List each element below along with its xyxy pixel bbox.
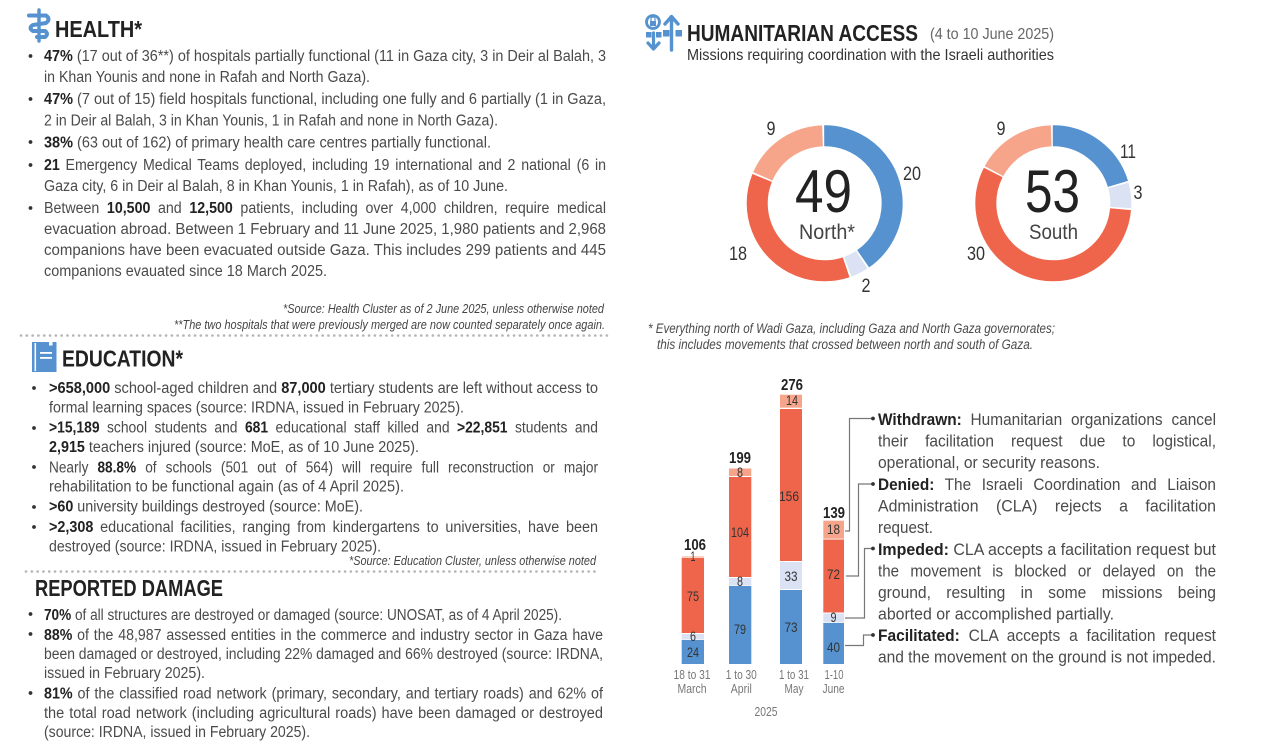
text block: education bullets: rehabilitation to be functional again (as of 4 April 2025). bbox=[49, 478, 404, 496]
bar: April: 104 bbox=[731, 524, 749, 540]
text block: health bullets bbox=[29, 48, 606, 280]
text block: reported damage bullets: been damaged or destroyed, including 22% damaged and 66% destroyed (source: IRDNA, bbox=[44, 646, 603, 663]
source note: health: **The two hospitals that were previously merged are now counted separately once again. bbox=[174, 317, 605, 332]
text block: health bullets: 2 in Deir al Balah, 3 in Khan Younis, 1 in Rafah and none in North Gaza). bbox=[44, 112, 498, 130]
source note: health: *Source: Health Cluster as of 2 June 2025, unless otherwise noted bbox=[283, 301, 605, 316]
legend text: denied: Administration (CLA) rejects a facilitation bbox=[878, 496, 1216, 516]
donut chart: north: North* bbox=[799, 221, 855, 244]
axis labels: June bbox=[822, 682, 845, 696]
donut chart: south bbox=[967, 119, 1142, 271]
bar: May: 14 bbox=[786, 392, 798, 408]
legend text: impeded: aborted or accomplished partially. bbox=[878, 604, 1114, 624]
bar: April: 199 bbox=[729, 450, 751, 467]
bar: March: 106 bbox=[684, 537, 706, 554]
footnote: north definition: this includes movements that crossed between north and south of Gaza. bbox=[657, 337, 1033, 352]
legend text: withdrawn bbox=[878, 410, 1216, 472]
text block: reported damage bullets: the total road network (including agricultural roads) have been damaged or destroyed bbox=[44, 705, 603, 722]
bar: March: 24 bbox=[687, 644, 699, 660]
axis labels: 2025 bbox=[754, 705, 778, 719]
donut chart: south: South bbox=[1029, 221, 1078, 244]
text block: reported damage bullets: issued in February 2025). bbox=[44, 665, 205, 682]
axis labels: May bbox=[784, 682, 804, 696]
bar: May bbox=[779, 377, 803, 664]
text block: education bullets: 2,915 teachers injured (source: MoE, as of 10 June 2025). bbox=[49, 439, 419, 456]
axis labels: March bbox=[678, 682, 707, 696]
axis labels bbox=[674, 668, 845, 719]
donut chart: north: 49 bbox=[795, 158, 852, 225]
legend text: denied bbox=[878, 475, 1216, 537]
legend text: impeded: Impeded: CLA accepts a facilitation request but bbox=[878, 540, 1216, 559]
bar: April: 79 bbox=[734, 621, 746, 637]
icon: health staff with snake bbox=[29, 10, 48, 41]
legend text: denied: Denied: The Israeli Coordination and Liaison bbox=[878, 475, 1216, 494]
donut chart: north: 18 bbox=[729, 244, 747, 265]
legend text: facilitated: and the movement on the ground is not impeded. bbox=[878, 648, 1216, 666]
bar: March: 1 bbox=[690, 548, 696, 564]
legend text: withdrawn: their facilitation request due to logistical, bbox=[878, 432, 1216, 450]
text block: education bullets: destroyed (source: IRDNA, issued in February 2025). bbox=[49, 538, 381, 556]
text block: education bullets bbox=[32, 380, 598, 556]
text block: health bullets: 21 Emergency Medical Teams deployed, including 19 international and 2 national (6 in bbox=[44, 157, 606, 174]
legend text: denied: request. bbox=[878, 518, 933, 537]
icon: education book bbox=[32, 342, 56, 372]
footnote: north definition bbox=[648, 321, 1055, 352]
donut chart: north: 20 bbox=[903, 164, 921, 185]
bar: May: 33 bbox=[784, 568, 798, 584]
text block: reported damage bullets: 70% of all structures are destroyed or damaged (source: UNOSAT, as of 4 April 2025). bbox=[44, 607, 562, 624]
text block: health bullets: Between 10,500 and 12,500 patients, including over 4,000 children, require medical bbox=[44, 200, 606, 217]
text block: health bullets: companions evauated since 18 March 2025. bbox=[44, 263, 327, 280]
axis labels: 1-10 bbox=[824, 668, 844, 682]
bar: June: 40 bbox=[827, 639, 840, 655]
donut chart: north: 2 bbox=[862, 276, 870, 297]
source note: education: *Source: Education Cluster, unless otherwise noted bbox=[349, 553, 597, 568]
text block: education bullets: >60 university buildings destroyed (source: MoE). bbox=[49, 498, 363, 516]
text block: education bullets: >15,189 school students and 681 educational staff killed and >22,851 students and bbox=[49, 420, 598, 436]
bar: May: 156 bbox=[779, 488, 799, 504]
legend text: withdrawn: operational, or security reasons. bbox=[878, 453, 1100, 472]
donut chart: north: 9 bbox=[766, 119, 776, 140]
legend text: facilitated: Facilitated: CLA accepts a facilitation request bbox=[878, 626, 1216, 645]
subtitle: Missions requiring coordination with the Israeli authorities bbox=[687, 47, 1054, 64]
bar: June bbox=[823, 505, 845, 664]
text block: health bullets: in Khan Younis and none in Rafah and North Gaza). bbox=[44, 69, 370, 86]
axis labels: April bbox=[731, 682, 752, 696]
bar: March: 6 bbox=[690, 628, 696, 644]
bar: May: 276 bbox=[781, 377, 803, 394]
donut chart: north bbox=[729, 119, 921, 297]
axis labels: 18 to 31 bbox=[674, 668, 711, 682]
text block: reported damage bullets: 81% of the classified road network (primary, secondary, and tertiary roads) and 62% of bbox=[44, 686, 604, 702]
text block: education bullets: >658,000 school-aged children and 87,000 tertiary students are left without access to bbox=[49, 380, 598, 397]
axis labels: 1 to 30 bbox=[726, 668, 757, 682]
text block: education bullets: >2,308 educational facilities, ranging from kindergartens to universities, have been bbox=[49, 519, 598, 536]
axis labels: 1 to 31 bbox=[779, 668, 809, 682]
text block: reported damage bullets bbox=[29, 607, 604, 741]
bar: June: 139 bbox=[823, 505, 845, 522]
bar: June: 72 bbox=[827, 566, 840, 582]
legend text: impeded bbox=[878, 540, 1216, 624]
text block: education bullets: formal learning spaces (source: IRDNA, issued in February 2025). bbox=[49, 400, 464, 416]
legend text: impeded: ground, resulting in some missions being bbox=[878, 583, 1216, 602]
donut chart: south: 3 bbox=[1134, 183, 1142, 204]
text block: health bullets: 38% (63 out of 162) of primary health care centres partially functional. bbox=[44, 134, 491, 152]
heading: education: EDUCATION* bbox=[62, 346, 183, 372]
source note: health bbox=[174, 301, 605, 332]
legend text: impeded: the movement is blocked or delayed on the bbox=[878, 562, 1216, 580]
bar: March: 75 bbox=[687, 588, 699, 604]
connector lines from bars to legend bbox=[845, 417, 875, 646]
text block: health bullets: 47% (7 out of 15) field hospitals functional, including one fully and 6 partially (1 in Gaza, bbox=[44, 91, 606, 108]
text block: health bullets: 47% (17 out of 36**) of hospitals partially functional (11 in Gaza city, 3 in Deir al Balah, 3 bbox=[44, 48, 606, 65]
heading: health: HEALTH* bbox=[55, 16, 142, 42]
heading: reported damage: REPORTED DAMAGE bbox=[35, 575, 223, 601]
footnote: north definition: * Everything north of Wadi Gaza, including Gaza and North Gaza governorates; bbox=[648, 321, 1055, 336]
donut chart: south: 53 bbox=[1025, 158, 1080, 225]
bar: April bbox=[729, 450, 751, 664]
text block: health bullets: companions have been evacuated outside Gaza. This includes 299 patients and 445 bbox=[44, 242, 606, 259]
bar: April: 8 bbox=[737, 573, 743, 589]
legend text: withdrawn: Withdrawn: Humanitarian organizations cancel bbox=[878, 410, 1216, 429]
donut chart: south: 9 bbox=[996, 119, 1006, 140]
bar: March bbox=[682, 537, 706, 664]
bar: May: 73 bbox=[784, 619, 798, 635]
bar: June: 9 bbox=[830, 609, 837, 625]
stacked bar chart: monthly missions bbox=[674, 377, 845, 719]
bar: June: 18 bbox=[827, 521, 840, 537]
text block: health bullets: evacuation abroad. Between 1 February and 11 June 2025, 1,980 patients and 2,968 bbox=[44, 221, 606, 238]
icon: humanitarian access arrows and lock bbox=[646, 16, 682, 50]
donut chart: south: 30 bbox=[967, 244, 985, 265]
text block: education bullets: Nearly 88.8% of schools (501 out of 564) will require full reconstruction or major bbox=[49, 460, 598, 476]
legend text: facilitated bbox=[878, 626, 1216, 666]
heading: humanitarian access: HUMANITARIAN ACCESS bbox=[687, 20, 918, 46]
bar: April: 8 bbox=[737, 464, 743, 480]
text block: reported damage bullets: (source: IRDNA, issued in February 2025). bbox=[44, 724, 310, 741]
date range: (4 to 10 June 2025) bbox=[930, 26, 1054, 43]
text block: health bullets: Gaza city, 6 in Deir al Balah, 8 in Khan Younis, 1 in Rafah), as of 10 June. bbox=[44, 178, 508, 195]
text block: reported damage bullets: 88% of the 48,987 assessed entities in the commerce and industry sector in Gaza have bbox=[44, 627, 603, 644]
donut chart: south: 11 bbox=[1120, 142, 1136, 163]
